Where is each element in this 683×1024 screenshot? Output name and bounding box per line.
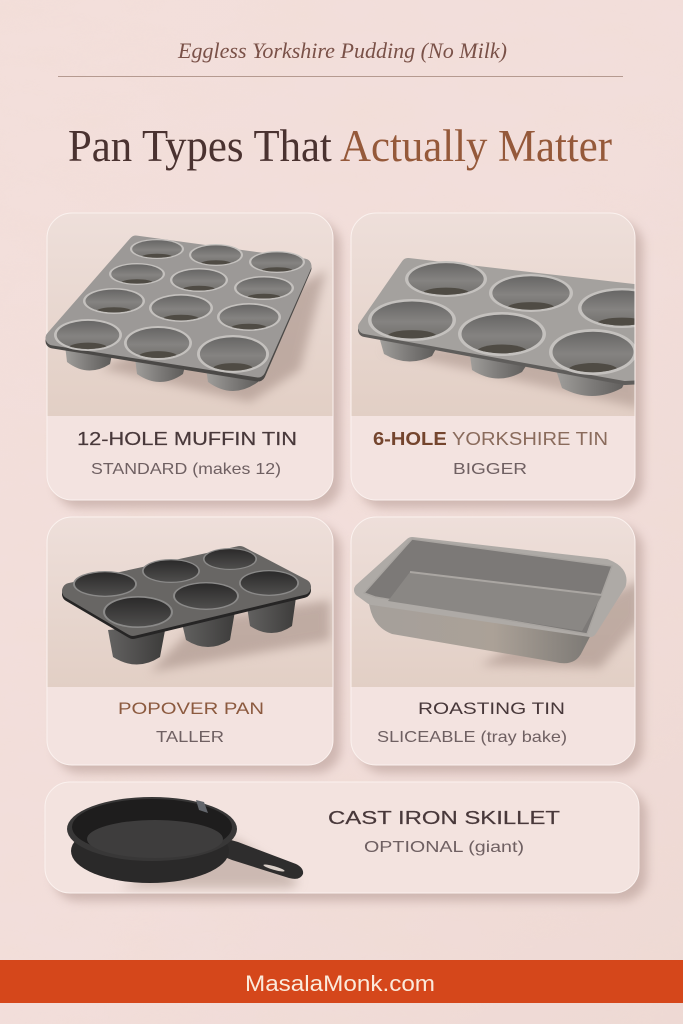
- label: cast iron skillet: CAST IRON SKILLET: [328, 808, 560, 828]
- label: 12-hole muffin tin: 12-HOLE MUFFIN TIN: [77, 429, 297, 449]
- note: standard: STANDARD (makes 12): [91, 461, 281, 478]
- note: optional: OPTIONAL (giant): [364, 839, 524, 856]
- icon: roasting tin: [361, 539, 619, 663]
- note: bigger: BIGGER: [453, 461, 527, 478]
- note: sliceable: SLICEABLE (tray bake): [377, 729, 567, 746]
- panel: 6-hole Yorkshire tin: [351, 213, 666, 508]
- footer banner: [0, 960, 683, 1003]
- icon: popover pan: [70, 548, 303, 664]
- panel: popover pan: [47, 517, 341, 773]
- footer banner: MasalaMonk.com: [245, 971, 435, 996]
- label: popover pan: POPOVER PAN: [118, 699, 264, 718]
- icon: 6-hole tin: [365, 261, 666, 396]
- panel: roasting tin: [351, 517, 643, 773]
- label: 6-hole Yorkshire tin: 6-HOLE YORKSHIRE TIN: [373, 429, 608, 449]
- title: Pan Types That Actually Matter: [68, 121, 612, 171]
- label: roasting tin: ROASTING TIN: [418, 699, 565, 718]
- note: taller: TALLER: [156, 729, 224, 746]
- panel: 12-hole muffin tin: [47, 213, 341, 508]
- icon: muffin tin: [53, 239, 305, 391]
- panel: cast iron skillet: [45, 782, 647, 901]
- icon: cast iron skillet: [67, 797, 303, 883]
- subtitle: Eggless Yorkshire Pudding (No Milk): [177, 38, 507, 63]
